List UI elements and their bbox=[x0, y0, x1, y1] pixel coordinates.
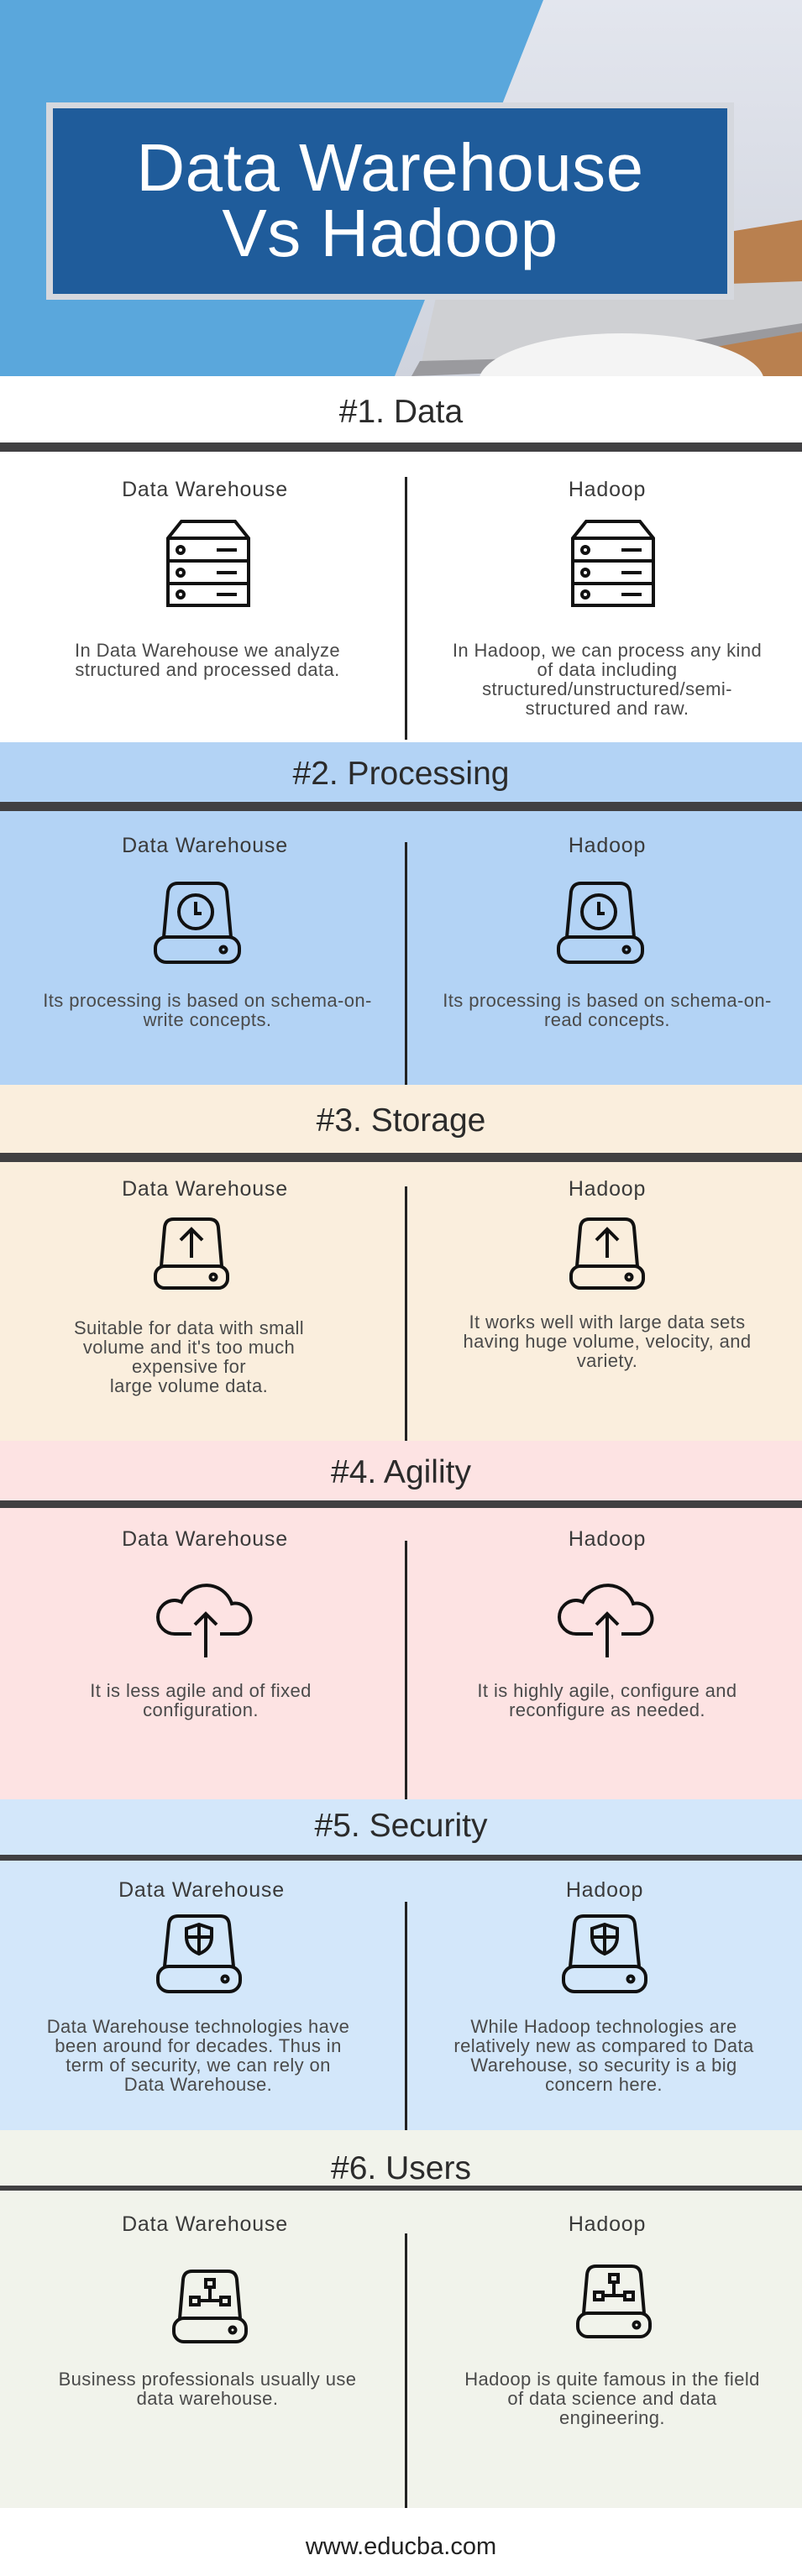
text 2 right: Its processing is based on schema-on- bbox=[443, 990, 772, 1011]
text 2 right: read concepts. bbox=[544, 1009, 670, 1030]
heading 2: #2. Processing bbox=[292, 756, 509, 792]
text 2 right bbox=[443, 990, 772, 1030]
icon: upload drive right bbox=[569, 1217, 645, 1290]
icon: shield drive left bbox=[156, 1914, 242, 1993]
icon: clock drive left bbox=[154, 882, 241, 964]
text 3 left: volume and it's too much bbox=[83, 1337, 295, 1358]
text 3 left: Suitable for data with small bbox=[74, 1317, 304, 1338]
title box: Data Warehouse bbox=[136, 130, 644, 205]
icon: shield drive right bbox=[562, 1914, 647, 1993]
icon: clock drive right bbox=[557, 882, 644, 964]
heading 3: #3. Storage bbox=[317, 1102, 485, 1139]
text 2 left: Its processing is based on schema-on- bbox=[43, 990, 372, 1011]
text 3 right: variety. bbox=[577, 1350, 637, 1371]
text 1 right: structured and raw. bbox=[526, 698, 689, 719]
text 5 right: While Hadoop technologies are bbox=[470, 2016, 737, 2037]
text 5 right: Warehouse, so security is a big bbox=[470, 2055, 737, 2076]
heading 1: #1. Data bbox=[339, 394, 463, 430]
text 4 right: reconfigure as needed. bbox=[509, 1699, 705, 1720]
text 3 right: It works well with large data sets bbox=[469, 1312, 746, 1333]
text 6 right bbox=[464, 2369, 760, 2428]
text 4 left: configuration. bbox=[143, 1699, 259, 1720]
text 1 left: In Data Warehouse we analyze bbox=[75, 640, 340, 661]
text 5 left: Data Warehouse technologies have bbox=[47, 2016, 349, 2037]
sub: dw 1: Data Warehouse bbox=[122, 478, 288, 501]
text 3 left: large volume data. bbox=[110, 1375, 268, 1396]
icon: network drive right bbox=[576, 2264, 652, 2338]
sub: hadoop 3: Hadoop bbox=[569, 1177, 646, 1201]
text 4 left: It is less agile and of fixed bbox=[90, 1680, 312, 1701]
section 4: Agility bbox=[0, 1441, 802, 1799]
section 2: Processing bbox=[0, 742, 802, 1085]
heading 5: #5. Security bbox=[315, 1808, 487, 1844]
icon: cloud right bbox=[558, 1584, 653, 1657]
text 1 right bbox=[453, 640, 762, 719]
footer url: www.educba.com bbox=[306, 2533, 496, 2560]
sub: dw 3: Data Warehouse bbox=[122, 1177, 288, 1201]
text 2 left bbox=[43, 990, 372, 1030]
text 4 left bbox=[90, 1680, 312, 1720]
icon: server left bbox=[166, 520, 250, 607]
section 3: Storage bbox=[0, 1085, 802, 1441]
heading 6: #6. Users bbox=[331, 2150, 471, 2186]
sub: dw 5: Data Warehouse bbox=[118, 1878, 285, 1902]
header banner bbox=[0, 0, 802, 376]
sub: hadoop 1: Hadoop bbox=[569, 478, 646, 501]
sub: dw 4: Data Warehouse bbox=[122, 1527, 288, 1551]
text 5 right: concern here. bbox=[545, 2074, 663, 2095]
text 6 left: data warehouse. bbox=[137, 2388, 278, 2409]
text 4 right: It is highly agile, configure and bbox=[477, 1680, 737, 1701]
text 3 left bbox=[74, 1317, 304, 1396]
text 6 right: engineering. bbox=[559, 2407, 665, 2428]
title box: Vs Hadoop bbox=[222, 196, 558, 270]
title box bbox=[46, 102, 734, 300]
text 3 right bbox=[464, 1312, 751, 1371]
sub: hadoop 4: Hadoop bbox=[569, 1527, 646, 1551]
section 1: Data bbox=[0, 376, 802, 742]
text 3 left: expensive for bbox=[132, 1356, 246, 1377]
section 6: Users bbox=[0, 2130, 802, 2508]
sub: dw 2: Data Warehouse bbox=[122, 834, 288, 857]
text 5 left bbox=[47, 2016, 349, 2095]
text 6 right: Hadoop is quite famous in the field bbox=[464, 2369, 760, 2390]
text 5 right bbox=[453, 2016, 754, 2095]
heading 4: #4. Agility bbox=[331, 1454, 471, 1490]
sub: hadoop 2: Hadoop bbox=[569, 834, 646, 857]
icon: upload drive left bbox=[154, 1217, 229, 1290]
text 3 right: having huge volume, velocity, and bbox=[464, 1331, 751, 1352]
icon: server right bbox=[571, 520, 655, 607]
text 2 left: write concepts. bbox=[144, 1009, 271, 1030]
sub: hadoop 6: Hadoop bbox=[569, 2212, 646, 2236]
text 6 right: of data science and data bbox=[507, 2388, 717, 2409]
icon: network drive left bbox=[172, 2270, 248, 2343]
sub: hadoop 5: Hadoop bbox=[566, 1878, 643, 1902]
text 1 right: of data including bbox=[537, 659, 678, 680]
icon: cloud left bbox=[156, 1584, 252, 1657]
text 6 left bbox=[59, 2369, 356, 2409]
section 5: Security bbox=[0, 1799, 802, 2130]
text 1 right: structured/unstructured/semi- bbox=[482, 678, 732, 699]
text 5 left: term of security, we can rely on bbox=[66, 2055, 331, 2076]
sub: dw 6: Data Warehouse bbox=[122, 2212, 288, 2236]
text 5 left: been around for decades. Thus in bbox=[55, 2035, 342, 2056]
text 1 left bbox=[75, 640, 340, 680]
text 4 right bbox=[477, 1680, 737, 1720]
text 1 left: structured and processed data. bbox=[75, 659, 340, 680]
text 1 right: In Hadoop, we can process any kind bbox=[453, 640, 762, 661]
text 5 right: relatively new as compared to Data bbox=[453, 2035, 754, 2056]
text 5 left: Data Warehouse. bbox=[124, 2074, 272, 2095]
text 6 left: Business professionals usually use bbox=[59, 2369, 356, 2390]
